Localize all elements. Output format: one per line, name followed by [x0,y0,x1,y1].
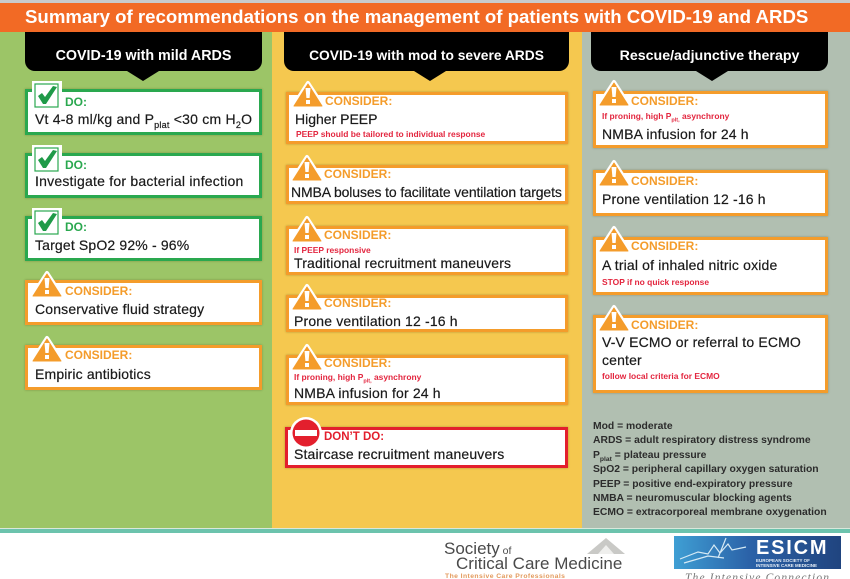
logo: Society of Critical Care Medicine: Society of [444,539,511,558]
card: NMBA infusion rescue: CONSIDER: [631,94,698,108]
card: inhaled nitric oxide: CONSIDER: [631,239,698,253]
card: prone ventilation: CONSIDER: [324,296,391,310]
legend: abbreviations: ARDS = adult respiratory distress syndrome [593,435,811,446]
logo: ESICM [674,536,841,579]
card: don't do staircase: Staircase recruitment maneuvers [294,446,504,462]
card: empiric antibiotics [24,336,263,391]
card: target SpO2 [24,208,263,262]
card: inhaled nitric oxide [592,226,830,296]
heading: mod to severe ARDS [284,32,569,81]
card: ECMO referral: follow local criteria for ECMO [602,371,720,381]
card: bacterial infection: DO: [65,158,87,172]
card: higher PEEP: PEEP should be tailored to individual response [296,129,485,139]
panel: rescue therapy background [582,32,850,528]
card: don't do staircase [284,417,570,470]
card: NMBA boluses: NMBA boluses to facilitate ventilation targets [291,184,562,200]
card: Vt recommendation: DO: [65,95,87,109]
logo: ESICM: EUROPEAN SOCIETY OF [756,558,810,563]
card: prone ventilation rescue: Prone ventilation 12 -16 h [602,191,766,207]
card: prone ventilation [284,284,570,334]
card: NMBA infusion: If proning, high Pplt, asynchrony [294,372,421,385]
legend: abbreviations: PEEP = positive end-expiratory pressure [593,479,793,490]
card: NMBA infusion: CONSIDER: [324,356,391,370]
card: ECMO referral: V-V ECMO or referral to ECMO [602,334,801,350]
card: bacterial infection: Investigate for bacterial infection [35,173,243,189]
title banner [0,3,850,32]
teal divider [0,528,850,533]
card: Vt recommendation [24,81,263,136]
card: traditional recruitment: Traditional recruitment maneuvers [294,255,511,271]
card: ECMO referral: center [602,352,642,368]
card: traditional recruitment: If PEEP responsive [294,245,371,255]
card: NMBA boluses [284,154,570,206]
card: NMBA infusion rescue [592,80,830,150]
card: prone ventilation rescue [592,160,830,218]
legend: abbreviations: Pplat = plateau pressure [593,450,706,463]
logo: Society of Critical Care Medicine [444,538,625,579]
card: traditional recruitment: CONSIDER: [324,228,391,242]
card: NMBA boluses: CONSIDER: [324,167,391,181]
card: don't do staircase: DON’T DO: [324,431,384,443]
card: inhaled nitric oxide: STOP if no quick response [602,277,709,287]
legend: abbreviations: SpO2 = peripheral capillary oxygen saturation [593,464,819,475]
logo: ESICM: INTENSIVE CARE MEDICINE [756,563,817,568]
heading: rescue therapy [591,32,828,81]
heading: rescue therapy: Rescue/adjunctive therapy [620,48,799,64]
card: prone ventilation rescue: CONSIDER: [631,174,698,188]
heading: mod to severe ARDS: COVID-19 with mod to severe ARDS [309,48,544,63]
card: empiric antibiotics: CONSIDER: [65,348,132,362]
heading: mild ARDS [25,32,262,81]
card: NMBA infusion rescue: NMBA infusion for 24 h [602,126,749,142]
card: higher PEEP: Higher PEEP [295,111,377,127]
card: empiric antibiotics: Empiric antibiotics [35,366,151,382]
logo: ESICM: ESICM [756,537,828,559]
card: bacterial infection [24,145,263,199]
card: prone ventilation: Prone ventilation 12 -16 h [294,313,458,329]
card: conservative fluid: CONSIDER: [65,284,132,298]
card: ECMO referral: CONSIDER: [631,318,698,332]
legend: abbreviations [593,421,827,518]
legend: abbreviations: ECMO = extracorporeal membrane oxygenation [593,507,827,518]
top strip [0,0,850,3]
card: ECMO referral [592,304,830,394]
legend: abbreviations: Mod = moderate [593,421,673,432]
card: Vt recommendation: Vt 4-8 ml/kg and Pplat <30 cm H2O [35,111,252,130]
card: target SpO2: Target SpO2 92% - 96% [35,237,189,253]
title banner: Summary of recommendations on the management of patients with COVID-19 and ARDS [25,6,808,27]
legend: abbreviations: NMBA = neuromuscular blocking agents [593,493,792,504]
logo: Society of Critical Care Medicine: Critical Care Medicine [456,554,622,573]
card: higher PEEP: CONSIDER: [325,94,392,108]
card: higher PEEP [284,80,570,146]
panel: moderate to severe ARDS background [272,32,582,528]
heading: mild ARDS: COVID-19 with mild ARDS [56,48,231,64]
card: NMBA infusion [284,344,570,406]
card: traditional recruitment [284,216,570,276]
card: NMBA infusion rescue: If proning, high Pplt, asynchrony [602,111,729,124]
card: conservative fluid [24,270,263,326]
card: inhaled nitric oxide: A trial of inhaled nitric oxide [602,257,777,273]
panel: mild ARDS background [0,32,272,528]
card: conservative fluid: Conservative fluid strategy [35,301,204,317]
card: NMBA infusion: NMBA infusion for 24 h [294,385,441,401]
card: target SpO2: DO: [65,220,87,234]
